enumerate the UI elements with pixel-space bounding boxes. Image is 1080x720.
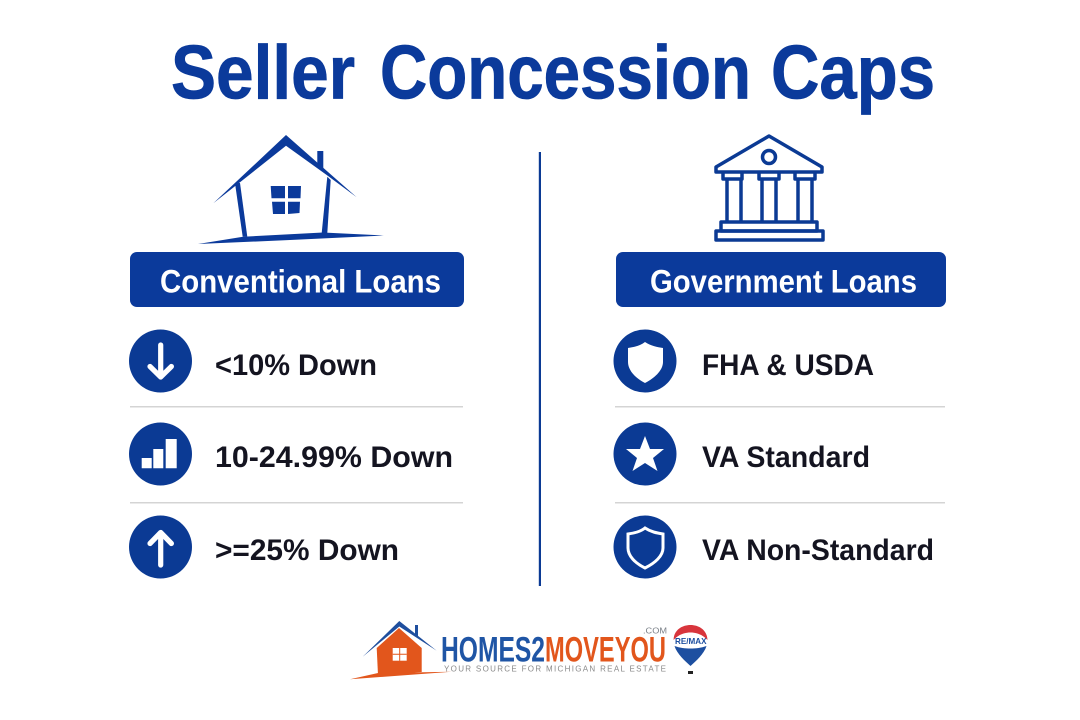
logo: RE/MAX balloon bbox=[673, 625, 708, 674]
row: 25% or more down bbox=[129, 516, 399, 578]
title: Caps bbox=[771, 30, 935, 115]
row: 25% or more down: >=25% Down bbox=[215, 534, 399, 567]
row: less than 10% down: <10% Down bbox=[215, 349, 377, 382]
icon: orange house bbox=[350, 621, 452, 679]
panel: government loans bbox=[614, 136, 946, 578]
icon: solid shield bbox=[614, 330, 676, 392]
logo wordmark: MOVEYOU bbox=[545, 630, 666, 670]
title bbox=[171, 30, 935, 115]
logo wordmark: HOMES2 bbox=[441, 630, 545, 670]
row: VA standard bbox=[614, 422, 870, 486]
logo wordmark: .COM bbox=[643, 626, 667, 636]
logo: RE/MAX balloon: RE/MAX bbox=[675, 636, 707, 646]
title: Seller bbox=[171, 30, 355, 115]
heading: conventional loans bbox=[130, 252, 464, 307]
title: Concession bbox=[380, 30, 751, 115]
row: FHA and USDA: FHA & USDA bbox=[702, 349, 874, 382]
icon: up arrow bbox=[129, 516, 192, 578]
logo wordmark: YOUR SOURCE FOR MICHIGAN REAL ESTATE bbox=[444, 665, 666, 674]
row: 10-24.99% down: 10-24.99% Down bbox=[215, 441, 453, 474]
heading: conventional loans: Conventional Loans bbox=[160, 264, 441, 300]
row: FHA and USDA bbox=[614, 330, 874, 392]
logo: Homes2MoveYou bbox=[350, 621, 708, 679]
row: 10-24.99% down bbox=[129, 422, 453, 486]
icon: bars bbox=[129, 422, 192, 486]
icon: bank building bbox=[716, 136, 823, 240]
row: less than 10% down bbox=[129, 330, 377, 392]
row: VA non-standard: VA Non-Standard bbox=[702, 534, 934, 567]
heading: government loans: Government Loans bbox=[650, 264, 917, 300]
row: VA standard: VA Standard bbox=[702, 441, 870, 474]
icon: outlined shield bbox=[614, 516, 676, 578]
icon: star bbox=[614, 422, 676, 486]
row: VA non-standard bbox=[614, 516, 934, 578]
panel: conventional loans bbox=[129, 135, 464, 578]
icon: down arrow bbox=[129, 330, 192, 392]
logo wordmark bbox=[441, 626, 667, 674]
center divider bbox=[539, 152, 541, 586]
heading: government loans bbox=[616, 252, 946, 307]
icon: house bbox=[198, 135, 384, 244]
